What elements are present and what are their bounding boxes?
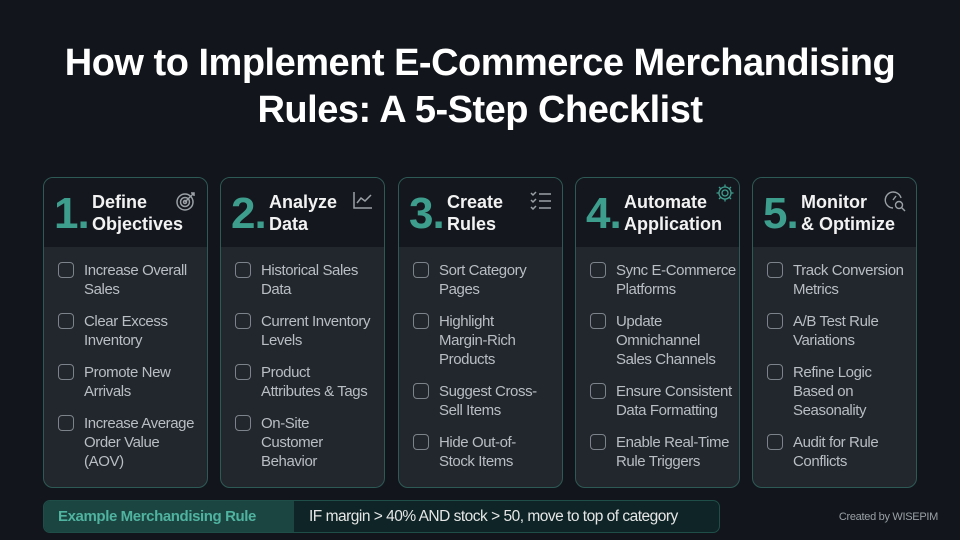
panel: step 2: Attributes & Tags <box>261 383 367 400</box>
panel: step 4: Platforms <box>616 281 676 298</box>
panel: step 2 <box>220 177 385 488</box>
panel: step 2: Historical Sales <box>261 262 358 279</box>
panel: step 1: Inventory <box>84 332 142 349</box>
panel: step 4: Enable Real-Time <box>616 434 729 451</box>
panel: step 5: Variations <box>793 332 855 349</box>
panel: step 1: (AOV) <box>84 453 124 470</box>
panel: step 2: On-Site <box>261 415 309 432</box>
panel: step 4: Ensure Consistent <box>616 383 732 400</box>
panel: step 4: Rule Triggers <box>616 453 700 470</box>
panel: step 2: 2. <box>231 189 266 238</box>
example rule bar: Example Merchandising Rule <box>58 508 256 525</box>
panel: step 1: Order Value <box>84 434 159 451</box>
panel: step 3: Create <box>447 192 503 212</box>
panel: step 2: Current Inventory <box>261 313 370 330</box>
panel: step 2: Levels <box>261 332 302 349</box>
title: How to Implement E-Commerce Merchandising <box>65 42 895 84</box>
panel: step 4: Omnichannel <box>616 332 700 349</box>
panel: step 3 <box>398 177 563 488</box>
title <box>65 42 895 131</box>
panel: step 2: Analyze <box>269 192 337 212</box>
panel: step 3: Hide Out-of- <box>439 434 516 451</box>
panel: step 5: Monitor <box>801 192 867 212</box>
panel: step 1: Increase Overall <box>84 262 187 279</box>
panel: step 3: Sort Category <box>439 262 526 279</box>
panel: step 5: Audit for Rule <box>793 434 878 451</box>
panel: step 3: 3. <box>409 189 444 238</box>
panel: step 4: Update <box>616 313 662 330</box>
panel: step 1: Increase Average <box>84 415 194 432</box>
panel: step 1: Promote New <box>84 364 170 381</box>
title: Rules: A 5-Step Checklist <box>257 89 703 131</box>
credit: Created by WISEPIM <box>839 511 938 523</box>
icon: target <box>176 192 195 211</box>
panel: step 4: Data Formatting <box>616 402 718 419</box>
panel: step 5: Metrics <box>793 281 839 298</box>
panel: step 3: Rules <box>447 214 496 234</box>
panel: step 4: Application <box>624 214 722 234</box>
panel: step 3: Suggest Cross- <box>439 383 537 400</box>
panel: step 5: Seasonality <box>793 402 866 419</box>
panel: step 1: Define <box>92 192 147 212</box>
panel: step 1: Arrivals <box>84 383 131 400</box>
panel: step 3: Products <box>439 351 495 368</box>
panel: step 1: Clear Excess <box>84 313 168 330</box>
icon: list <box>530 192 551 210</box>
example rule bar: IF margin > 40% AND stock > 50, move to top of category <box>309 508 678 524</box>
panel: step 4: 4. <box>586 189 621 238</box>
panel: step 3: Stock Items <box>439 453 513 470</box>
panel: step 1: 1. <box>54 189 89 238</box>
panel: step 2: Product <box>261 364 310 381</box>
panel: step 3: Sell Items <box>439 402 501 419</box>
panel: step 1 <box>43 177 208 488</box>
panel: step 3: Highlight <box>439 313 494 330</box>
panel: step 2: Behavior <box>261 453 317 470</box>
panel: step 5: Based on <box>793 383 853 400</box>
panel: step 2: Data <box>269 214 308 234</box>
panel: step 3: Margin-Rich <box>439 332 515 349</box>
panel: step 4 <box>575 177 740 488</box>
panel: step 4: Automate <box>624 192 707 212</box>
panel: step 5: 5. <box>763 189 798 238</box>
panel: step 5: Track Conversion <box>793 262 904 279</box>
panel: step 3: Pages <box>439 281 480 298</box>
panel: step 1: Objectives <box>92 214 183 234</box>
panel: step 1: Sales <box>84 281 120 298</box>
panel: step 2: Data <box>261 281 291 298</box>
panel: step 5: & Optimize <box>801 214 895 234</box>
panel: step 5: Refine Logic <box>793 364 872 381</box>
panel: step 5: Conflicts <box>793 453 847 470</box>
panel: step 4: Sync E-Commerce <box>616 262 736 279</box>
panel: step 4: Sales Channels <box>616 351 715 368</box>
icon: chart <box>353 192 372 209</box>
panel: step 2: Customer <box>261 434 323 451</box>
icon: gauge search <box>884 191 906 212</box>
example rule bar <box>43 500 720 533</box>
panel: step 5 <box>752 177 917 488</box>
panel: step 5: A/B Test Rule <box>793 313 878 330</box>
icon: gear <box>716 184 734 202</box>
